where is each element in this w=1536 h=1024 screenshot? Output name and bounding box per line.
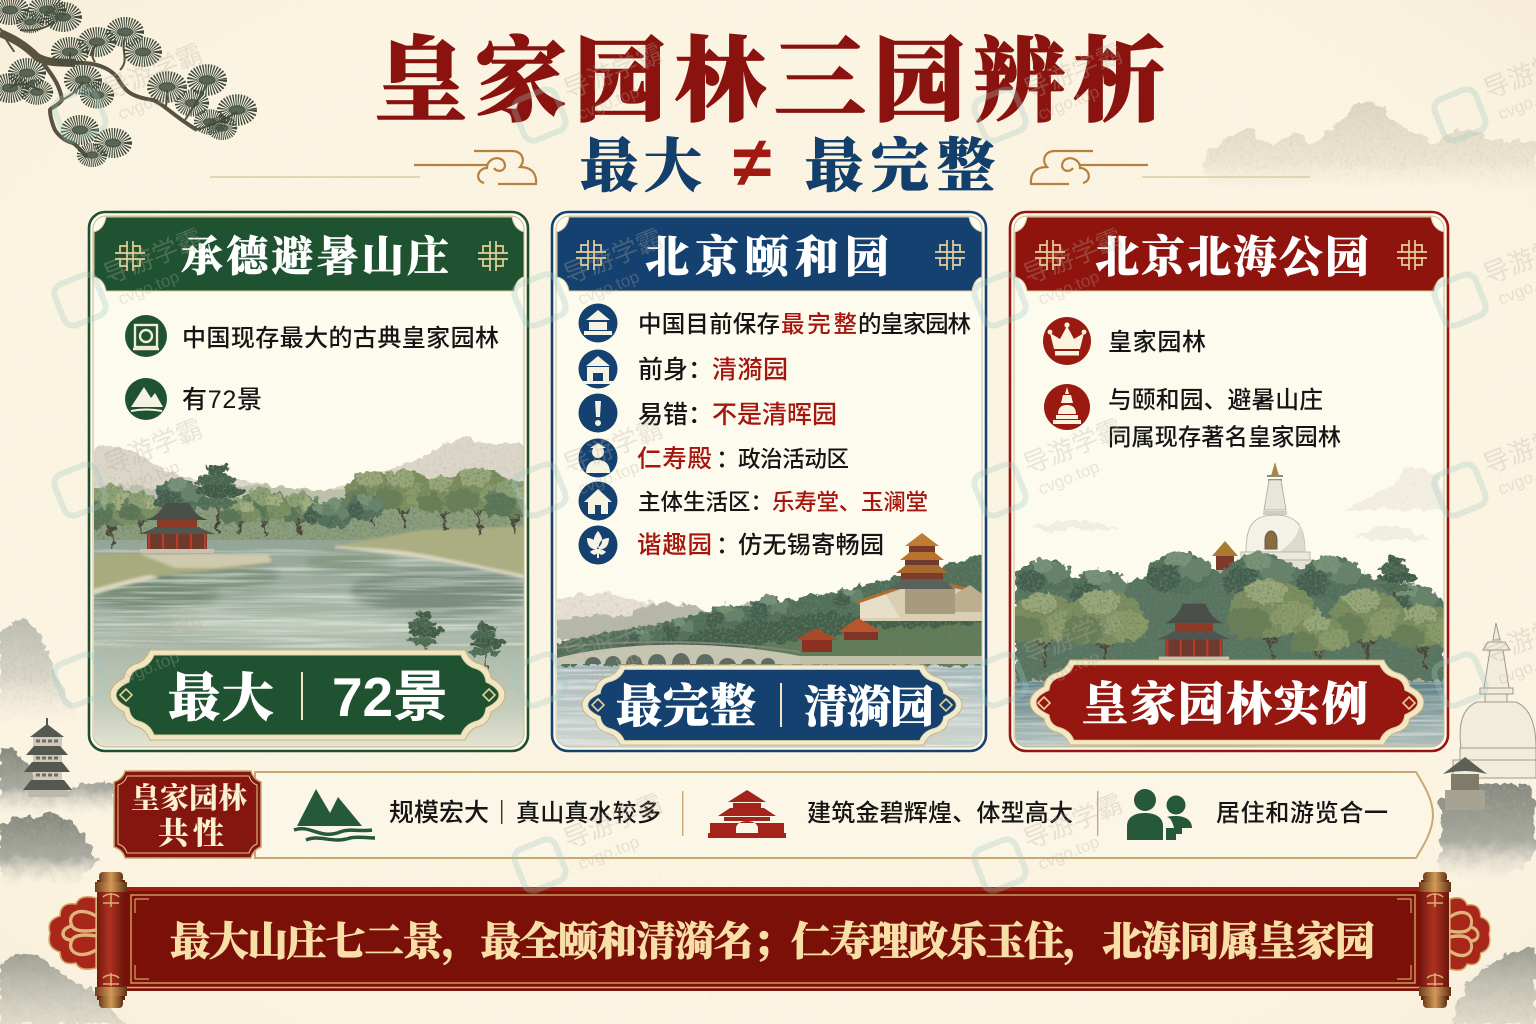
watermarks: 导游学霸 [559,413,667,480]
tag: 皇家园林共性 [114,771,261,858]
header band red [1015,217,1444,291]
row: most complete: 中国目前保存 [638,311,780,337]
watermarks: cvgo.top [575,457,642,499]
fact: largest classical garden: 中国现存最大的古典皇家园林 [182,325,499,352]
row: living area: 乐寿堂、玉澜堂 [772,490,928,515]
watermarks: 导游学霸 [1019,603,1127,670]
watermarks: 导游学霸 [99,413,207,480]
watermarks: 导游学霸 [559,223,667,290]
icon: house [578,482,618,520]
seventeen-arch bridge [557,642,985,664]
tower of Buddhist incense [858,533,982,621]
watermarks: 导游学霸 [1019,413,1127,480]
watermarks: cvgo.top [1035,832,1102,874]
common trait: living and touring [1127,789,1388,840]
fact: famous surviving gardens [1044,384,1341,450]
watermarks: 导游学霸 [99,38,207,105]
ink landscape bottom-left [0,618,125,1024]
icon: stupa [1044,384,1090,430]
watermarks: 导游学霸 [99,223,207,290]
panel border red [1010,212,1448,751]
header band green [94,217,524,291]
icon: mountain [125,378,167,420]
ink landscape bottom-right [1440,623,1536,1024]
row: living area: 主体生活区： [638,490,773,515]
row: garden of harmonious interest: 谐趣园 [637,531,712,559]
watermarks: cvgo.top [575,82,642,124]
row: predecessor: 前身： [638,356,713,384]
scroll rod left [95,872,127,1008]
badge: 最大 72景 [110,650,505,740]
panel: 北京北海公园 [1005,212,1460,751]
row: renshou hall: ： [716,446,740,473]
fact: famous surviving gardens: 同属现存著名皇家园林 [1108,424,1341,450]
badge: 最完整 清漪园 [582,665,962,745]
fact: largest classical garden [125,315,499,357]
pine branch top-left [0,1,251,162]
watermarks: 导游学霸 [99,603,207,670]
icon: leaf [578,526,618,564]
common trait: scale [294,789,661,840]
panel: commonalities bar [114,771,1433,858]
common trait: architecture: 建筑金碧辉煌、体型高大 [807,800,1073,827]
watermarks: cvgo.top [115,267,182,309]
badge: 最完整 清漪园: 清漪园 [804,683,934,732]
panel: 承德避暑山庄 [75,212,546,751]
scroll: mnemonic [49,872,1490,1008]
mnemonic text: 最大山庄七二景，最全颐和清漪名；仁寿理政乐玉住，北海同属皇家园 [170,919,1375,966]
common trait: architecture [708,790,1073,838]
row: renshou hall: 仁寿殿 [637,445,712,473]
row: garden of harmonious interest [578,526,884,564]
watermarks: 导游学霸 [1019,223,1127,290]
cloud ornament left [210,151,536,184]
row: most complete [578,304,971,342]
watermarks: cvgo.top [1035,647,1102,689]
tag: 皇家园林共性: 皇家园林 [131,781,247,815]
row: renshou hall: 政治活动区 [738,447,849,472]
header band blue [557,217,982,291]
small pavilion right [1443,757,1487,810]
common trait: scale: 规模宏大 [389,799,489,827]
icon: gate [578,350,618,388]
row: predecessor [578,350,788,388]
header band red: 北京北海公园 [1095,232,1369,282]
row: garden of harmonious interest: ： [716,532,740,559]
panel border blue [552,212,986,751]
subtitle: 最完整 [805,134,995,199]
header band green: 承德避暑山庄 [181,234,449,281]
badge: 皇家园林实例: 皇家园林实例 [1082,679,1368,730]
watermarks: cvgo.top [1035,82,1102,124]
fact: 72 scenes [125,378,262,420]
beihai landscape [1005,462,1460,750]
icon: garden plan [125,315,167,357]
fact: 72 scenes: 有72景 [182,386,262,414]
title: 皇家园林三园辨析 [375,31,1165,133]
badge: 最完整 清漪园: 最完整 [616,681,756,732]
row: most complete: 最完整 [781,311,857,337]
row: common error: 易错： [638,401,713,429]
row: common error [578,394,837,432]
common trait: living and touring: 居住和游览合一 [1216,800,1388,827]
shores [90,526,530,596]
lake landscape [75,439,546,750]
row: common error: 不是清晖园 [712,401,837,429]
common trait: scale: 真山真水较多 [516,800,661,827]
scroll flower right [1450,898,1490,970]
watermarks: cvgo.top [115,82,182,124]
row: living area [578,482,928,520]
subtitle: ≠ [733,123,771,201]
tag: 皇家园林共性: 共性 [158,816,224,851]
icon: crown [1043,317,1091,365]
watermarks: cvgo.top [575,832,642,874]
row: predecessor: 清漪园 [712,356,788,384]
panel: 北京颐和园 [552,212,986,751]
watermarks: 导游学霸 [1019,788,1127,855]
watermarks: cvgo.top [1035,267,1102,309]
watermarks: cvgo.top [115,647,182,689]
fact: famous surviving gardens: 与颐和园、避暑山庄 [1108,387,1323,414]
summer palace landscape [555,533,985,750]
white stupa [1209,462,1314,579]
row: garden of harmonious interest: 仿无锡寄畅园 [738,532,884,559]
water reflections [75,552,530,633]
row: most complete: 的皇家园林 [858,311,971,337]
header band blue: 北京颐和园 [645,232,889,282]
watermarks: 导游学霸 [559,603,667,670]
icon: palace gate [708,790,786,838]
scroll body [122,887,1424,991]
subtitle [580,123,995,201]
watermarks: 导游学霸 [559,788,667,855]
small temples [795,618,882,652]
badge: 最大 72景: 最大 [168,670,274,728]
watermarks: 导游学霸 [1019,38,1127,105]
watermarks: cvgo.top [1035,457,1102,499]
icon: exclamation [578,394,618,432]
icon: mountain and water [294,789,375,840]
icon: official [578,438,618,478]
watermarks: cvgo.top [575,267,642,309]
watermarks: cvgo.top [115,457,182,499]
badge: 最大 72景: 72景 [332,666,448,728]
badge: 皇家园林实例 [1030,660,1424,745]
ink mountains top-right [1205,103,1536,190]
scroll flower left [49,897,96,969]
icon: people [1127,789,1192,840]
scroll rod right [1419,872,1451,1008]
watermarks: cvgo.top [575,647,642,689]
watermarks: 导游学霸 [559,38,667,105]
fact: imperial garden [1043,317,1206,365]
white stupa right [1453,623,1536,778]
fact: imperial garden: 皇家园林 [1108,329,1206,356]
panel border green [89,212,528,751]
subtitle: 最大 [580,134,702,199]
row: renshou hall [578,438,849,478]
pagoda left [23,718,72,797]
icon: hall [578,304,618,342]
cloud ornament right [1031,151,1310,184]
